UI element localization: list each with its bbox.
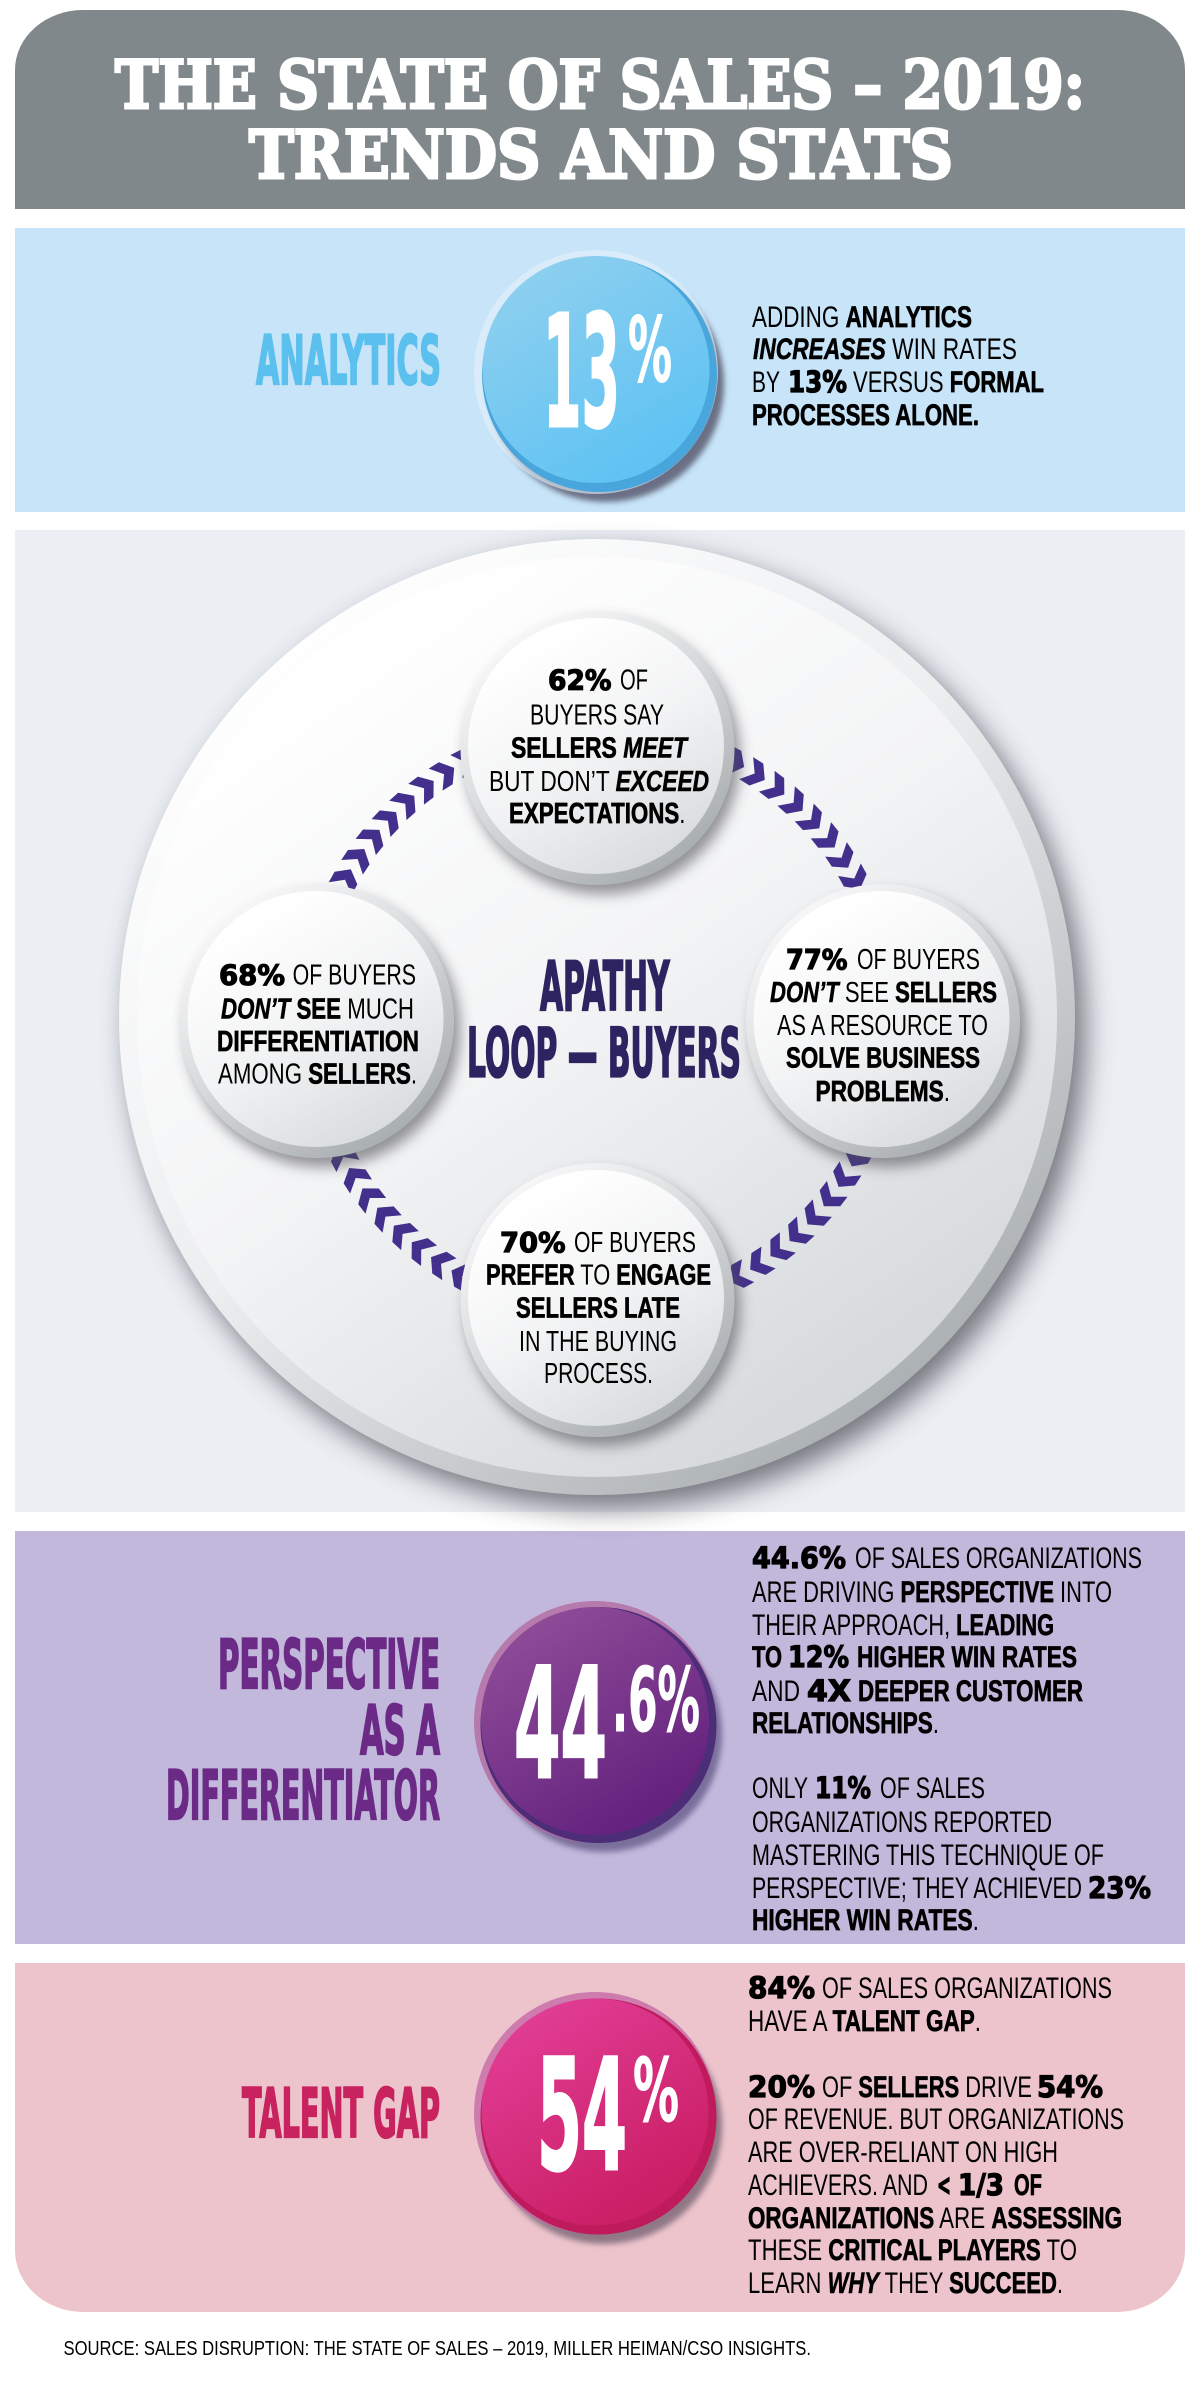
text: talent gap description: LEARN WHY THEY SUCCEED.: [748, 2267, 1063, 2300]
text: perspective description: THEIR APPROACH, LEADING: [752, 1609, 1054, 1642]
text: analytics description: VERSUS FORMAL: [853, 366, 1044, 399]
title: TRENDS AND STATS: [249, 116, 953, 194]
text: talent gap description: OF: [1014, 2169, 1042, 2202]
text: analytics description: PROCESSES ALONE.: [752, 399, 979, 432]
text: perspective description: [752, 1541, 1151, 1937]
text: perspective description: HIGHER WIN RATES.: [752, 1904, 979, 1937]
callout: 62% circle: BUT DON’T EXCEED: [489, 766, 709, 798]
icon: 13% circle badge: %: [628, 298, 672, 403]
icon: 44.6% circle badge: 44: [514, 1636, 607, 1814]
text: talent gap description: ACHIEVERS. AND: [748, 2169, 928, 2202]
text: talent gap description: ARE OVER-RELIANT ON HIGH: [748, 2136, 1058, 2169]
text: talent gap description: <: [937, 2168, 951, 2202]
panel: title band: [15, 10, 1185, 209]
text: perspective description: TO: [752, 1641, 782, 1674]
text: talent gap description: THESE CRITICAL PLAYERS TO: [748, 2234, 1077, 2267]
panel: talent gap: TALENT GAP: [242, 2075, 440, 2154]
text: perspective description: 12%: [788, 1640, 849, 1674]
callout: 77% circle: PROBLEMS.: [816, 1076, 950, 1108]
arrow: bottom-right chevrons: [723, 1141, 874, 1293]
text: perspective description: 44.6%: [752, 1541, 846, 1575]
callout: 68% circle: DON’T SEE MUCH: [221, 994, 414, 1026]
text: perspective description: ONLY: [752, 1772, 808, 1805]
text: talent gap description: HAVE A TALENT GAP.: [748, 2005, 981, 2038]
icon: 54% circle badge: 54: [537, 2027, 627, 2206]
arrow: bottom-left chevrons: [326, 1140, 477, 1292]
panel: apathy loop background: [15, 530, 1185, 1512]
panel: perspective content: PERSPECTIVE: [218, 1626, 440, 1705]
arrow: top-left chevrons: [329, 745, 482, 895]
callout: 77% circle: OF BUYERS: [857, 944, 980, 976]
panel: purple background: [15, 1531, 1185, 1944]
callout: 77% circle: [746, 884, 1026, 1167]
icon: 13% circle badge: [474, 250, 724, 502]
callout: 70% circle: PREFER TO ENGAGE: [486, 1260, 711, 1292]
text: talent gap description: 84%: [748, 1971, 815, 2005]
callout: 62% circle: OF: [620, 664, 648, 696]
text: talent gap description: 20%: [748, 2070, 815, 2104]
callout: 68% circle: AMONG SELLERS.: [218, 1059, 417, 1091]
text: perspective description: OF SALES: [880, 1772, 985, 1805]
callout: 68% circle: DIFFERENTIATION: [217, 1026, 419, 1058]
text: perspective description: 11%: [815, 1771, 871, 1805]
panel: perspective content: DIFFERENTIATOR: [166, 1757, 440, 1836]
callout: 77% circle: 77%: [786, 943, 848, 976]
callout: 70% circle: SELLERS LATE: [516, 1293, 680, 1325]
panel: perspective content: [166, 1541, 1151, 1937]
callout: 77% circle: AS A RESOURCE TO: [777, 1010, 988, 1042]
text: perspective description: DEEPER CUSTOMER: [858, 1675, 1083, 1708]
icon: 54% circle badge: %: [633, 2040, 679, 2142]
arrow: top-right chevrons: [719, 745, 871, 895]
text: perspective description: ORGANIZATIONS REPORTED: [752, 1806, 1052, 1839]
heading: perspective as a differentiator: [166, 1626, 440, 1836]
text: perspective description: RELATIONSHIPS.: [752, 1707, 939, 1740]
icon: 44.6% circle badge: [474, 1601, 722, 1852]
callout: 77% circle: SOLVE BUSINESS: [786, 1043, 980, 1075]
text: analytics description: ADDING ANALYTICS: [752, 301, 972, 334]
callout: 62% circle: EXPECTATIONS.: [509, 798, 686, 830]
callout: 68% circle: [180, 884, 460, 1167]
icon: 44.6% circle badge: .6%: [612, 1649, 700, 1752]
text: perspective description: ARE DRIVING PERSPECTIVE INTO: [752, 1576, 1112, 1609]
panel: perspective content: AS A: [360, 1692, 440, 1771]
panel: analytics: [15, 228, 1185, 512]
text: talent gap description: ORGANIZATIONS ARE ASSESSING: [748, 2202, 1122, 2235]
callout: 70% circle: PROCESS.: [544, 1358, 653, 1390]
panel: talent gap: [15, 1963, 1185, 2312]
text: perspective description: 4X: [807, 1674, 851, 1708]
title: THE STATE OF SALES – 2019:: [115, 46, 1085, 124]
text: talent gap description: 54%: [1037, 2070, 1103, 2104]
panel: analytics: ANALYTICS: [256, 322, 441, 401]
text: perspective description: AND: [752, 1675, 800, 1708]
text: talent gap description: 1/3: [958, 2168, 1004, 2202]
chart: apathy loop disc: LOOP — BUYERS: [467, 1014, 741, 1094]
heading: apathy loop: [467, 948, 741, 1094]
icon: 13% circle badge: 13: [543, 282, 620, 463]
callout: 77% circle: DON’T SEE SELLERS: [770, 977, 997, 1009]
callout: 68% circle: 68%: [219, 959, 285, 992]
text: talent gap description: [748, 1971, 1124, 2300]
text: analytics description: 13%: [788, 365, 847, 399]
text: source: SOURCE: SALES DISRUPTION: THE STATE OF SALES – 2019, MILLER HEIMAN/CSO INSIGHTS.: [64, 2338, 811, 2360]
text: perspective description: 23%: [1088, 1871, 1151, 1905]
callout: 62% circle: SELLERS MEET: [511, 732, 689, 764]
callout: 70% circle: IN THE BUYING: [519, 1326, 677, 1358]
icon: 54% circle badge: [474, 1992, 722, 2244]
title: [115, 46, 1085, 194]
callout: 62% circle: [460, 611, 740, 894]
chart: apathy loop disc: [119, 539, 1085, 1508]
callout: 62% circle: 62%: [548, 664, 612, 696]
text: perspective description: HIGHER WIN RATES: [857, 1641, 1077, 1674]
callout: 62% circle: BUYERS SAY: [530, 700, 664, 732]
callout: 70% circle: OF BUYERS: [574, 1227, 696, 1259]
callout: 68% circle: OF BUYERS: [293, 960, 416, 992]
callout: 70% circle: [460, 1163, 740, 1446]
text: analytics description: [752, 301, 1044, 432]
text: talent gap description: OF SELLERS DRIVE: [822, 2071, 1032, 2104]
callout: 70% circle: 70%: [500, 1226, 566, 1259]
text: analytics description: INCREASES WIN RATES: [753, 333, 1017, 366]
heading: apathy loop: APATHY: [540, 948, 670, 1027]
text: analytics description: BY: [752, 366, 780, 399]
